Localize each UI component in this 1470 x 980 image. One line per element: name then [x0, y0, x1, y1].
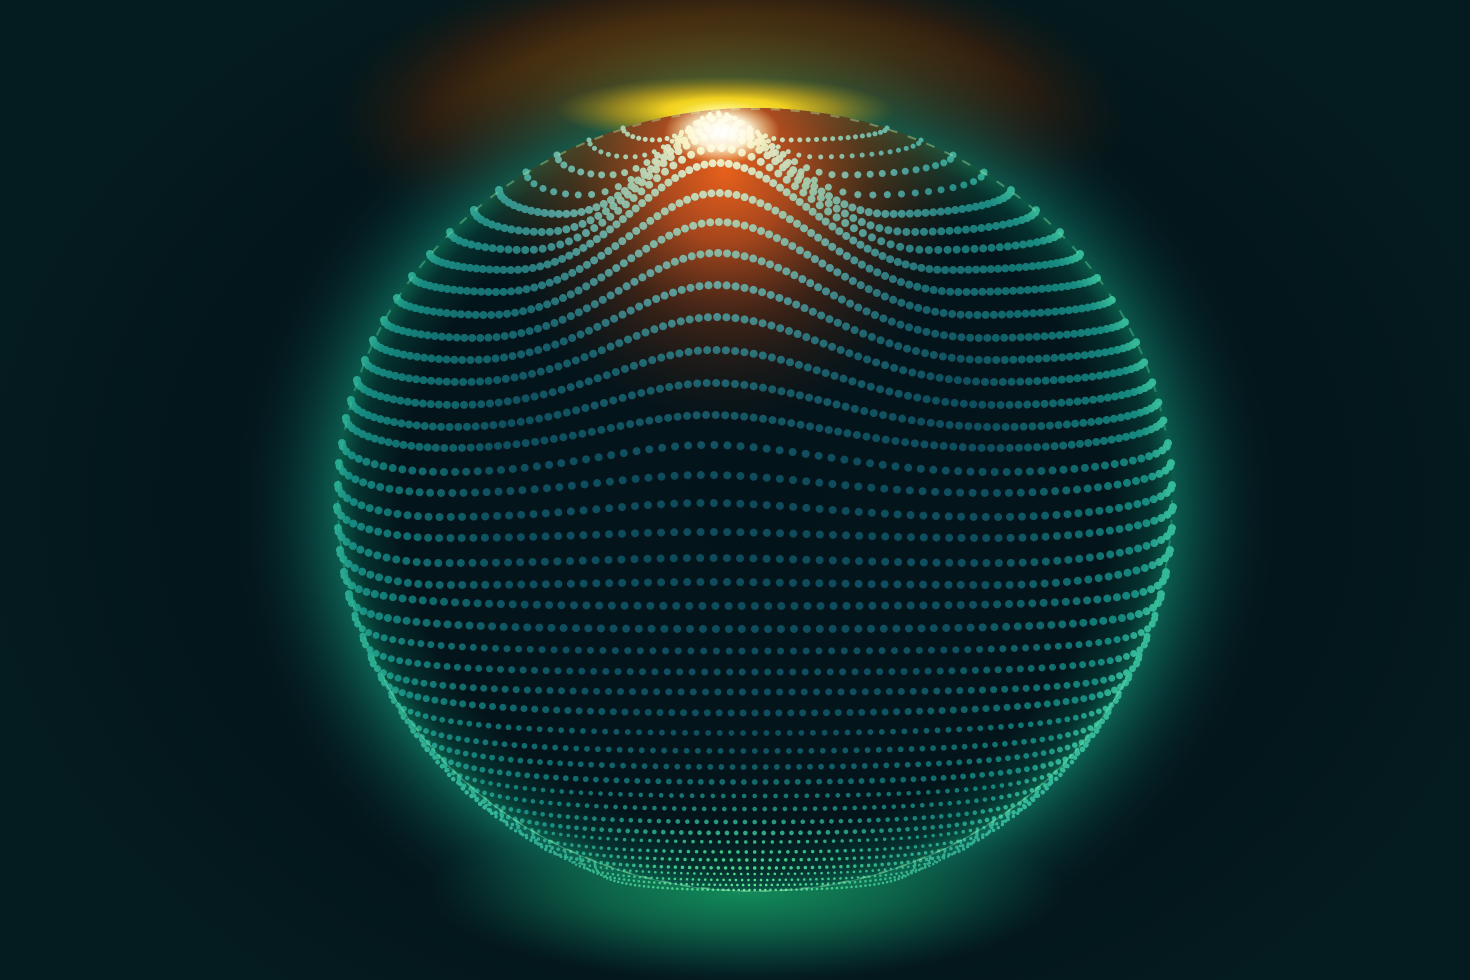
inner light	[490, 108, 972, 402]
dot rows bottom highlight	[337, 113, 1173, 890]
top yellow flare	[555, 76, 895, 144]
rim dashes	[338, 109, 1172, 891]
olive glow under top	[494, 108, 972, 226]
sphere	[333, 108, 1177, 892]
dot rows top highlight	[337, 113, 1173, 890]
orange glow	[510, 108, 940, 402]
top orange glow	[330, 0, 1130, 280]
white light at pole	[664, 100, 780, 164]
sphere body	[337, 108, 1173, 892]
thin lower rim line	[384, 680, 1126, 891]
illustration: glowing dotted sphere	[272, 0, 1238, 974]
bottom green glow	[425, 804, 1065, 980]
dot rows base colour	[337, 113, 1173, 890]
